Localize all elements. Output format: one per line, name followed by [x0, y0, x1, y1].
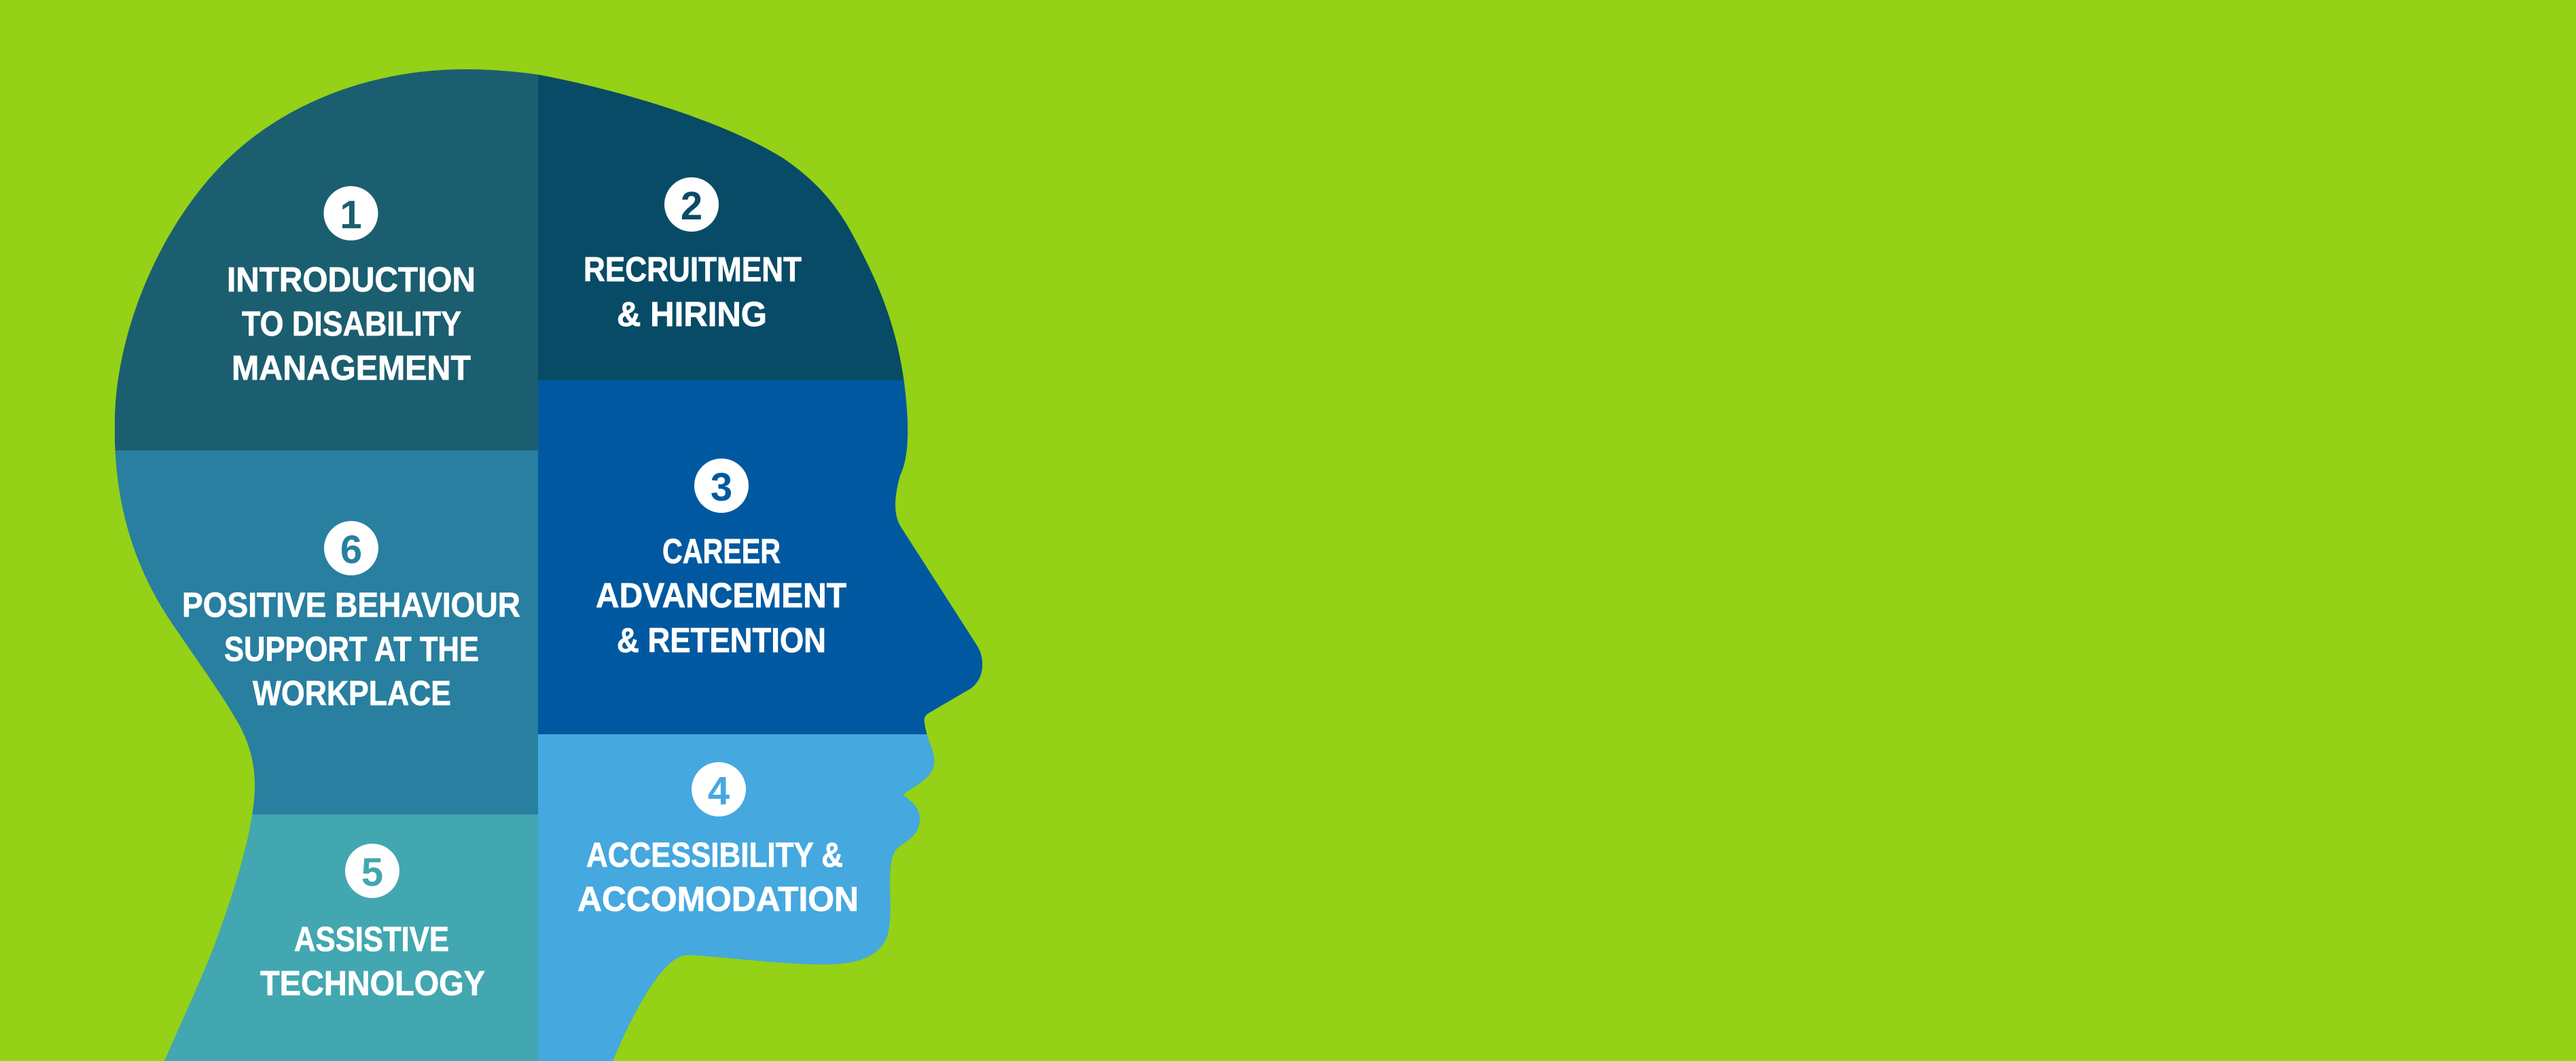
panel 2 shape — [538, 75, 904, 380]
panel 4 label: ACCESSIBILITY & — [586, 835, 843, 874]
panel 5 shape — [136, 814, 538, 1061]
panel 6 label — [182, 586, 520, 713]
panel 5 label: TECHNOLOGY — [260, 964, 485, 1003]
panel 3 label — [596, 532, 846, 660]
panel 2: recruitment and hiring — [538, 75, 904, 380]
badge 2: 2 — [681, 184, 702, 228]
panel 3 label: CAREER — [662, 532, 781, 571]
panel 1 label: TO DISABILITY — [242, 304, 461, 343]
panel 6: positive behaviour support at the workplace — [102, 450, 538, 814]
head infographic — [115, 69, 982, 1061]
panel 3 label: & RETENTION — [617, 621, 826, 660]
panel 1 label: INTRODUCTION — [227, 260, 476, 299]
badge 1 — [323, 186, 378, 240]
panel 6 label: WORKPLACE — [253, 674, 451, 713]
badge 5: 5 — [361, 850, 383, 895]
panel 5 label — [260, 920, 485, 1003]
panel 6 label: POSITIVE BEHAVIOUR — [182, 586, 520, 624]
badge 1: 1 — [340, 193, 362, 237]
panel 2 label: RECRUITMENT — [584, 250, 802, 289]
panel 4 label: ACCOMODATION — [577, 880, 859, 918]
panel 1 shape — [115, 69, 538, 450]
panel 1 label — [227, 260, 476, 387]
panel 3 shape — [538, 380, 1014, 734]
badge 4 — [692, 762, 746, 816]
badge 6 — [324, 521, 378, 575]
panel 4 shape — [538, 734, 959, 1061]
badge 3: 3 — [711, 465, 732, 509]
panel 2 label — [584, 250, 802, 334]
panel 5: assistive technology — [136, 814, 538, 1061]
badge 5 — [345, 844, 399, 898]
badge 4: 4 — [708, 769, 730, 813]
panel 6 label: SUPPORT AT THE — [224, 630, 479, 668]
panel 3: career advancement and retention — [538, 380, 1014, 734]
badge 3 — [694, 458, 749, 513]
panel 2 label: & HIRING — [617, 295, 767, 334]
panel 4: accessibility and accomodation — [538, 734, 959, 1061]
panel 5 label: ASSISTIVE — [294, 920, 449, 958]
panel 3 label: ADVANCEMENT — [596, 576, 846, 615]
panel 1: introduction to disability management — [115, 69, 538, 450]
badge 6: 6 — [340, 528, 362, 572]
panel 4 label — [577, 835, 859, 918]
badge 2 — [664, 177, 719, 232]
panel 6 shape — [102, 450, 538, 814]
panel 1 label: MANAGEMENT — [232, 348, 471, 387]
